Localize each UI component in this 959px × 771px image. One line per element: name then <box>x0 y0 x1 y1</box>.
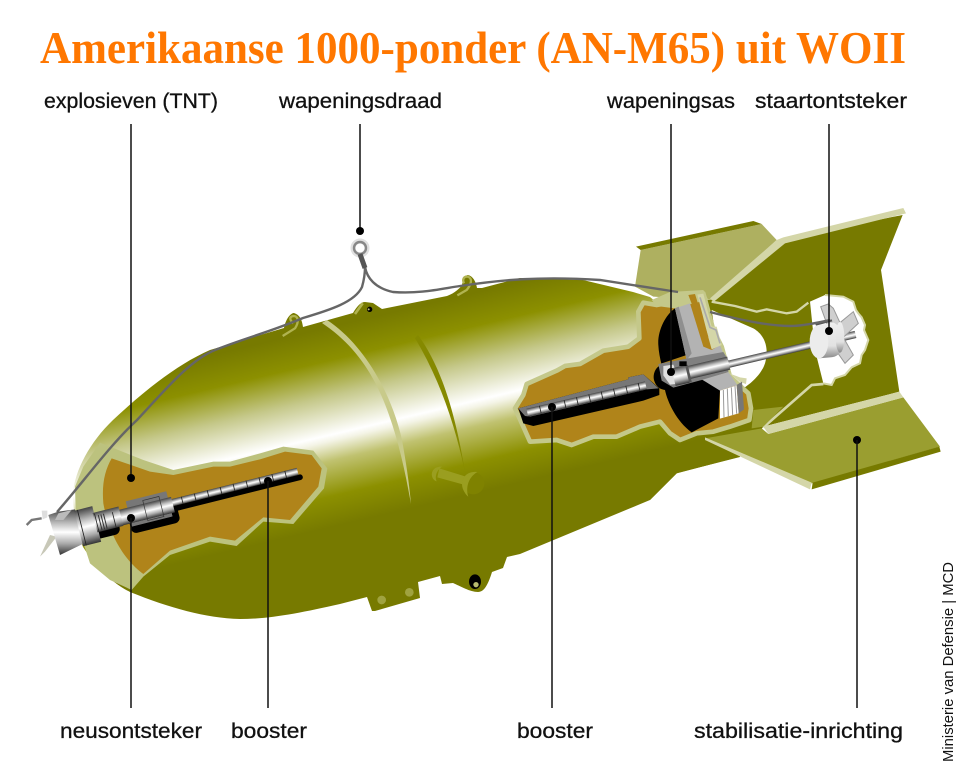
nose booster and fuse <box>27 455 306 557</box>
label: neusontsteker: neusontsteker <box>60 719 202 743</box>
credit: Ministerie van Defensie | MCD <box>940 562 957 762</box>
body seams <box>322 320 465 504</box>
leader lines and dots <box>127 124 861 708</box>
bomb body <box>73 275 740 619</box>
grey casing <box>675 294 747 419</box>
bomb illustration <box>27 208 941 619</box>
tail fuse <box>810 304 858 363</box>
label: staartontsteker: staartontsteker <box>755 89 907 113</box>
label: explosieven: explosieven (TNT) <box>44 89 218 113</box>
lower tail fin <box>705 392 941 489</box>
black bulkhead <box>654 308 720 432</box>
central tube and shaft <box>658 327 857 388</box>
tail cut-away <box>515 290 857 445</box>
title: Amerikaanse 1000-ponder (AN-M65) uit WOII <box>40 22 906 73</box>
top tail fin <box>635 221 777 300</box>
label: wapeningsdraad: wapeningsdraad <box>278 89 442 113</box>
label: wapeningsas: wapeningsas <box>606 89 735 113</box>
top lugs <box>283 277 471 336</box>
arming wire <box>57 267 830 512</box>
label: stabilisatie-inrichting: stabilisatie-inrichting <box>694 719 903 743</box>
fin cut-out <box>810 295 868 385</box>
large tail fin <box>620 208 906 500</box>
booster tube <box>74 455 306 546</box>
rear booster <box>518 374 659 426</box>
nose cut-away: explosives <box>75 443 327 590</box>
arming ring <box>353 241 367 268</box>
label: booster tail: booster <box>517 719 593 743</box>
trunnion and lower lugs <box>377 467 484 604</box>
bulkhead, casing and arming shaft <box>654 294 857 432</box>
label: booster nose: booster <box>231 719 307 743</box>
white opening behind the tail <box>712 310 767 388</box>
fuse vanes <box>27 509 84 557</box>
